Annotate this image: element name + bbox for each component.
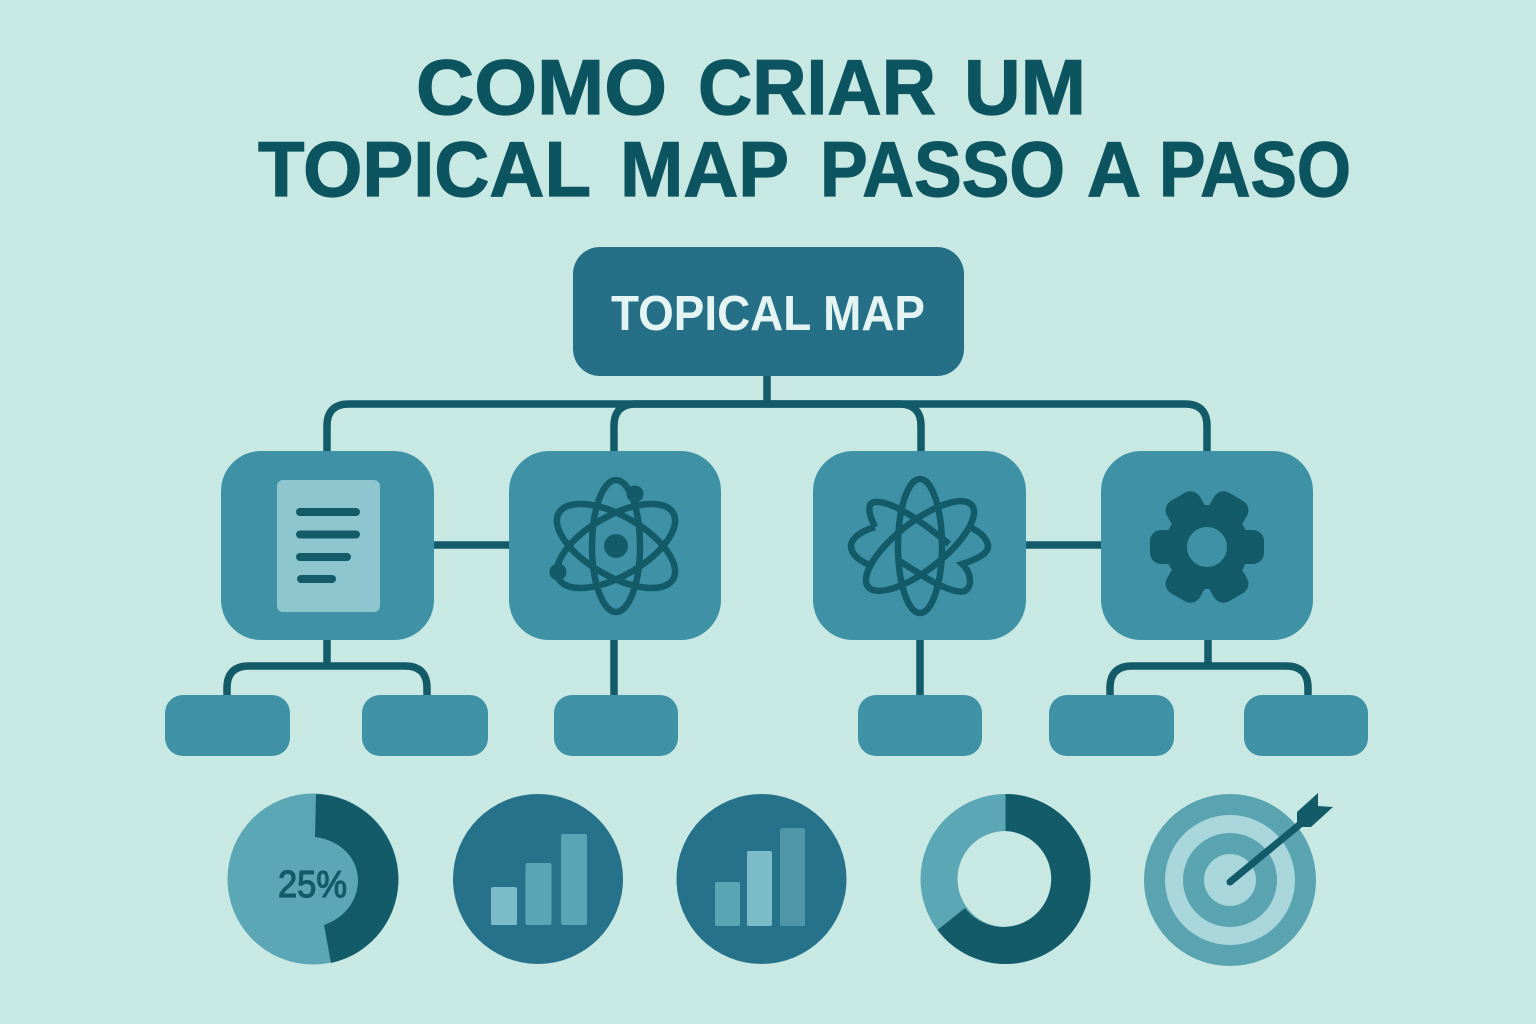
icon: document: [277, 480, 380, 612]
title: COMO: [416, 43, 667, 131]
node: gear: [1101, 451, 1313, 640]
title: A: [1087, 125, 1141, 213]
chart: bar chart variant: [676, 794, 846, 964]
icon: gear: [1150, 487, 1264, 607]
title: PASO: [1159, 125, 1351, 213]
chart: bar chart ascending: [453, 794, 623, 964]
title: [258, 43, 1351, 213]
icon: atom with electrons: [544, 480, 688, 612]
title: PASSO: [820, 125, 1065, 213]
connectors: top node to main nodes: [327, 376, 1207, 451]
connectors: main nodes to leaf nodes: [227, 640, 1308, 695]
title: UM: [964, 43, 1086, 131]
chart: pie 25%: [228, 794, 398, 964]
chart: pie 25%: 25%: [278, 864, 347, 906]
title: CRIAR: [698, 43, 936, 131]
icon: stylised atom: [851, 479, 988, 613]
leaf nodes: [165, 695, 1368, 756]
node: stylised atom: [813, 451, 1026, 640]
title: MAP: [620, 125, 789, 213]
icon: target with arrow: [1144, 793, 1333, 966]
top node: Topical Map: TOPICAL MAP: [611, 287, 925, 341]
node: document: [221, 451, 434, 640]
top node: Topical Map: [573, 247, 964, 376]
connectors: between main nodes: [434, 541, 1101, 549]
title: TOPICAL: [258, 125, 591, 213]
node: atom: [509, 451, 721, 640]
chart: donut: [938, 794, 1091, 964]
